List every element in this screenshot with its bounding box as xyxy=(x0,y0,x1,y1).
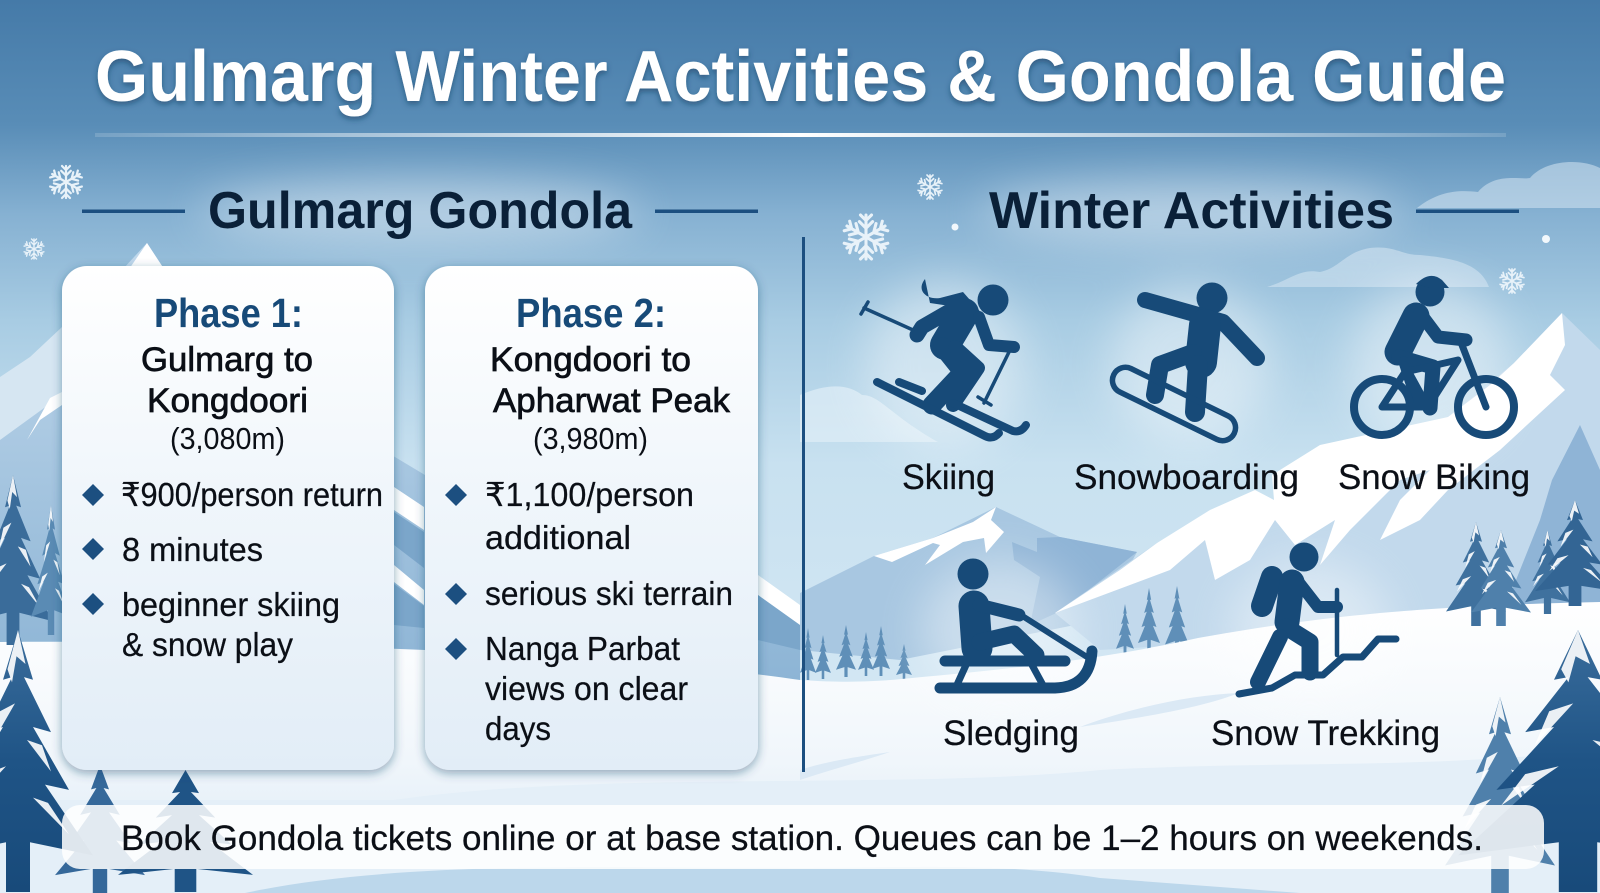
background: mountains xyxy=(0,243,1600,720)
phase 1 bullet: terrain: & snow play xyxy=(122,626,293,663)
phase 2 heading: Phase 2: xyxy=(516,290,666,336)
phase 2 route xyxy=(490,341,731,456)
phase 2 bullet: price: additional xyxy=(485,519,631,556)
label: Skiing: Skiing xyxy=(902,458,995,497)
background: distant tree lines xyxy=(800,586,1189,680)
heading: Gulmarg Gondola xyxy=(82,182,758,240)
icon: sledging xyxy=(940,558,1092,688)
heading: Gulmarg Gondola: Gulmarg Gondola xyxy=(208,182,633,240)
label: Snowboarding: Snowboarding xyxy=(1074,458,1299,497)
callout: booking note: Book Gondola tickets online or at base station. Queues can be 1–2 hours on weekends. xyxy=(121,819,1483,858)
background: pine trees left xyxy=(0,475,253,893)
phase 1 heading: Phase 1: xyxy=(154,290,303,336)
phase 2 route: Kongdoori to xyxy=(490,341,691,379)
icon: snow trekking xyxy=(1239,542,1396,694)
background: soft glow behind headings and icons xyxy=(200,180,1510,700)
phase 2 bullet: price xyxy=(445,476,694,556)
title rule xyxy=(95,133,1506,137)
phase 1 bullet: price: ₹900/person return xyxy=(121,476,383,513)
icon: snowboarding xyxy=(1108,282,1257,445)
phase 1 bullet: duration: 8 minutes xyxy=(122,531,263,568)
background: snowflakes and dots xyxy=(24,166,1550,293)
phase 2 bullet: views xyxy=(445,630,688,747)
phase 2 bullet: terrain: serious ski terrain xyxy=(485,575,733,612)
vertical divider xyxy=(802,237,805,772)
phase 2 route: Apharwat Peak xyxy=(493,382,731,420)
heading: Winter Activities: Winter Activities xyxy=(989,182,1394,240)
phase 1 route: Gulmarg to xyxy=(141,341,313,379)
background: clouds xyxy=(800,162,1600,442)
icon: snow biking xyxy=(1354,276,1514,435)
phase 1 route xyxy=(141,341,313,456)
phase 2 bullet: views: days xyxy=(485,710,551,747)
phase 2 bullet: views: Nanga Parbat xyxy=(485,630,680,667)
phase 2 bullet: views: views on clear xyxy=(485,670,688,707)
phase 2 bullet: price: ₹1,100/person xyxy=(485,476,694,513)
icon: skiing xyxy=(861,279,1026,437)
title: Gulmarg Winter Activities & Gondola Guide xyxy=(95,37,1506,117)
callout: booking note xyxy=(62,805,1544,869)
phase 1 bullet: terrain xyxy=(82,586,340,663)
panel: Phase 2 xyxy=(425,266,758,770)
label: Snow Trekking: Snow Trekking xyxy=(1211,714,1440,753)
phase 1 route: (3,080m) xyxy=(170,421,285,456)
phase 2 route: (3,980m) xyxy=(533,421,648,456)
label: Snow Biking: Snow Biking xyxy=(1338,458,1530,497)
label: Sledging: Sledging xyxy=(943,714,1079,753)
phase 1 route: Kongdoori xyxy=(147,382,308,420)
background: snow hills xyxy=(0,602,1600,893)
phase 1 bullet: terrain: beginner skiing xyxy=(122,586,340,623)
background: pine trees right xyxy=(1445,500,1600,893)
panel: Phase 1 xyxy=(62,266,394,770)
